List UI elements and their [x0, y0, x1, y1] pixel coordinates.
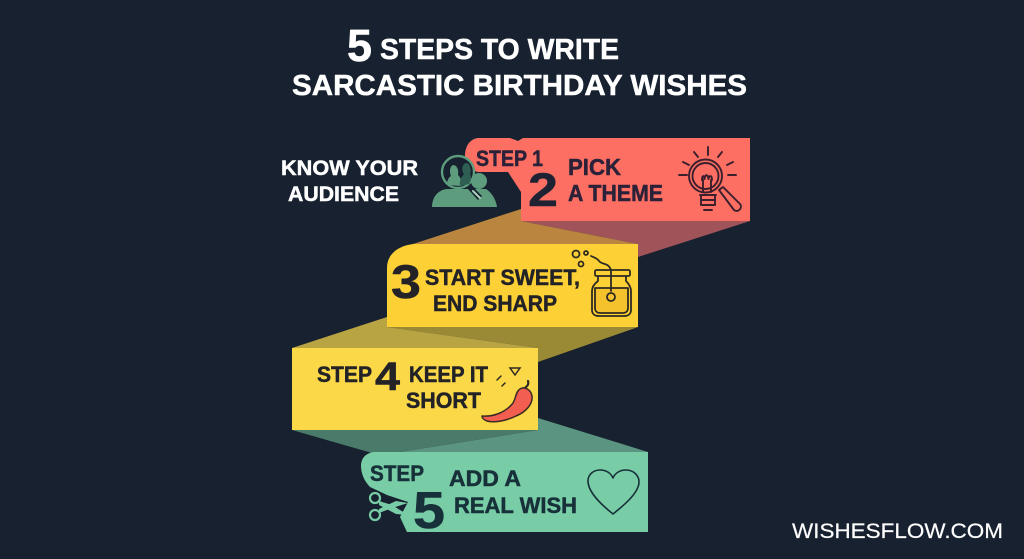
panel: step 4: SHORT — [406, 388, 482, 413]
number 5: 5 — [413, 482, 445, 540]
panel: step 5 — [361, 452, 648, 540]
keep it short text: KEEP IT — [409, 362, 489, 387]
icon: audience with magnifier — [432, 156, 497, 207]
number 3: 3 — [391, 255, 421, 308]
title: 5 — [347, 20, 372, 71]
number 4: 4 — [375, 355, 401, 399]
add a real wish text: ADD A — [449, 466, 521, 491]
title: STEPS TO WRITE — [380, 34, 619, 66]
panel: step 3: END SHARP — [433, 291, 557, 316]
icon: heart outline — [588, 470, 639, 514]
panel: know your audience label: AUDIENCE — [288, 183, 399, 206]
fold: pale gold connector — [292, 317, 538, 348]
start sweet text: START SWEET, — [425, 265, 580, 290]
icon: honey jar — [572, 250, 631, 316]
fold: yellow to yellow shadow — [387, 327, 638, 362]
icon: chili pepper — [482, 368, 532, 422]
step 1 label: STEP 1 — [476, 146, 543, 171]
fold: olive-green connector — [292, 430, 538, 453]
panel: step 4 — [292, 348, 538, 430]
step label: STEP — [317, 362, 372, 387]
title — [292, 20, 747, 102]
panel: step 3 — [387, 244, 638, 327]
fold: orange connector — [413, 209, 638, 244]
panel: step 5: REAL WISH — [454, 493, 577, 518]
icon: light bulb with magnifier — [679, 147, 741, 211]
fold: green shadow — [400, 418, 648, 452]
panel: step 1 and 2: A THEME — [568, 180, 663, 206]
fold: red to yellow shadow — [521, 221, 750, 257]
panel: step 1 and 2 — [465, 138, 750, 221]
pick a theme text: PICK — [568, 154, 621, 180]
number 2: 2 — [528, 163, 558, 216]
panel: know your audience label — [281, 157, 418, 206]
panel: know your audience label: KNOW YOUR — [281, 157, 418, 180]
watermark text: WISHESFLOW.COM — [792, 520, 1003, 543]
step label: STEP — [370, 461, 424, 486]
title: SARCASTIC BIRTHDAY WISHES — [292, 70, 747, 102]
icon: scissors — [370, 493, 408, 520]
